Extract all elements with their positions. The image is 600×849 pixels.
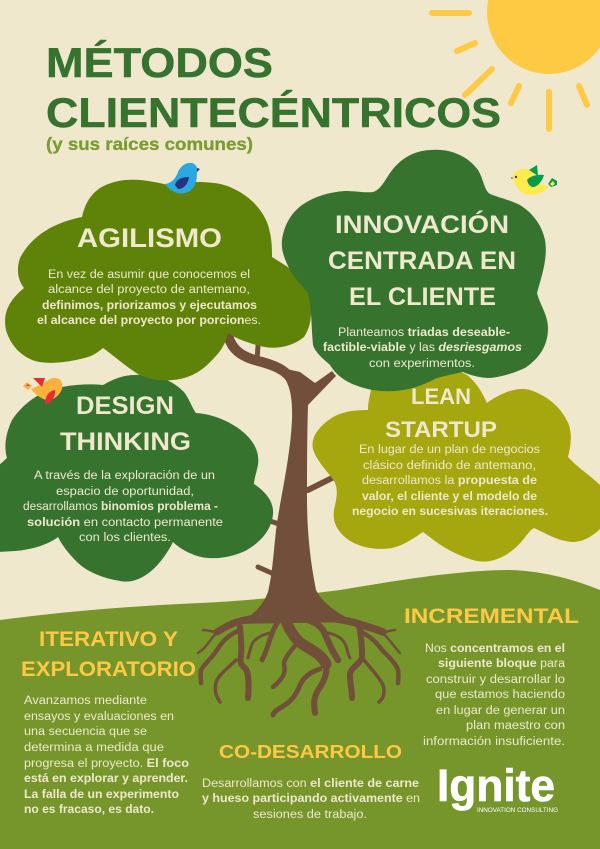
icon: orange bird (23, 378, 62, 405)
hill (0, 570, 600, 849)
icon: yellow bird (511, 165, 557, 195)
body: iterativo: determina a medida que (24, 742, 164, 754)
body: incremental: información insuficiente. (423, 736, 565, 748)
heading: centrada en: CENTRADA EN (328, 247, 516, 275)
body: iterativo: Avanzamos mediante (24, 695, 147, 707)
body: iterativo (24, 695, 189, 816)
body: agilismo: el alcance del proyecto por porcion es. (37, 315, 261, 327)
title: MÉTODOS (46, 39, 273, 86)
body: design thinking (23, 470, 223, 544)
body: lean startup: desarrollamos la propuesta de (362, 475, 537, 487)
panel: design thinking (0, 375, 273, 582)
body: design thinking: solución en contacto permanente (27, 517, 223, 529)
heading: exploratorio: EXPLORATORIO (21, 658, 196, 681)
heading: innovación: INNOVACIÓN (335, 209, 509, 239)
body: lean startup: valor, el cliente y el modelo de (362, 491, 537, 503)
body: incremental: plan maestro con (466, 720, 565, 732)
body: design thinking: con los clientes. (79, 532, 171, 544)
body: incremental: en lugar de generar un (436, 705, 565, 717)
body: innovación: factible-viable y las desriesgamos (323, 342, 522, 354)
body: incremental: construir y desarrollar lo (426, 674, 565, 686)
body: agilismo: alcance del proyecto de antemano, (48, 284, 250, 296)
heading: startup: STARTUP (385, 417, 497, 442)
body: iterativo: una secuencia que se (24, 726, 147, 738)
heading: agilismo: AGILISMO (77, 223, 222, 253)
body: iterativo: progresa el proyecto. El foco (24, 758, 189, 770)
panel: innovación centrada en el cliente (282, 150, 548, 391)
panel: agilismo (5, 180, 311, 380)
heading: el cliente: EL CLIENTE (349, 283, 496, 311)
body: co-desarrollo (202, 778, 420, 821)
body: co-desarrollo: sesiones de trabajo. (253, 809, 367, 821)
logo: ignite: Ignite (437, 760, 555, 811)
body: agilismo (37, 269, 261, 327)
body: lean startup (352, 444, 548, 518)
heading: lean: LEAN (411, 384, 471, 409)
body: iterativo: ensayos y evaluaciones en (24, 711, 174, 723)
body: lean startup: clásico definido de antemano, (363, 460, 536, 472)
body: incremental: que estamos haciendo (435, 689, 565, 701)
body: design thinking: desarrollamos binomios problema - (23, 501, 218, 513)
body: innovación (323, 327, 522, 370)
panel: lean startup (312, 369, 600, 562)
roots (198, 612, 400, 715)
body: lean startup: En lugar de un plan de negocios (359, 444, 540, 456)
body: design thinking: A través de la exploración de un (34, 470, 215, 482)
body: innovación: Planteamos triadas deseable- (338, 327, 510, 339)
heading: iterativo y: ITERATIVO Y (39, 628, 178, 651)
body: agilismo: definimos, priorizamos y ejecutamos (42, 300, 257, 312)
heading: co-desarrollo: CO-DESARROLLO (219, 741, 402, 762)
small branch stubs (257, 346, 282, 575)
body: co-desarrollo: Desarrollamos con el cliente de carne (202, 778, 419, 790)
body: agilismo: En vez de asumir que conocemos el (48, 269, 250, 281)
body: co-desarrollo: y hueso participando activamente en (202, 793, 420, 805)
heading line 2: THINKING (60, 428, 191, 456)
body: incremental (423, 643, 566, 748)
body: lean startup: negocio en sucesivas iteraciones. (352, 506, 548, 518)
body: iterativo: La falla de un experimento (24, 789, 179, 801)
logo tagline: INNOVATION CONSULTING (477, 807, 558, 814)
heading: incremental: INCREMENTAL (404, 605, 579, 628)
tree with trunk, branches and roots (198, 335, 400, 715)
icon: blue bird (165, 163, 200, 193)
icon: sun (432, 0, 600, 129)
body: innovación: con experimentos. (369, 358, 475, 370)
title (46, 39, 501, 154)
tree trunk (235, 366, 355, 624)
body: incremental: siguiente bloque para (438, 658, 566, 670)
body: iterativo: no es fracaso, es dato. (24, 804, 154, 816)
body: incremental: Nos concentramos en el (425, 643, 565, 655)
body: design thinking: espacio de oportunidad, (56, 486, 194, 498)
upper left branch (228, 335, 296, 386)
title: CLIENTECÉNTRICOS (46, 89, 501, 136)
heading: design thinking: DESIGN (76, 392, 174, 420)
subtitle: (y sus raíces comunes) (46, 134, 253, 154)
body: iterativo: está en explorar y aprender. (24, 773, 188, 785)
